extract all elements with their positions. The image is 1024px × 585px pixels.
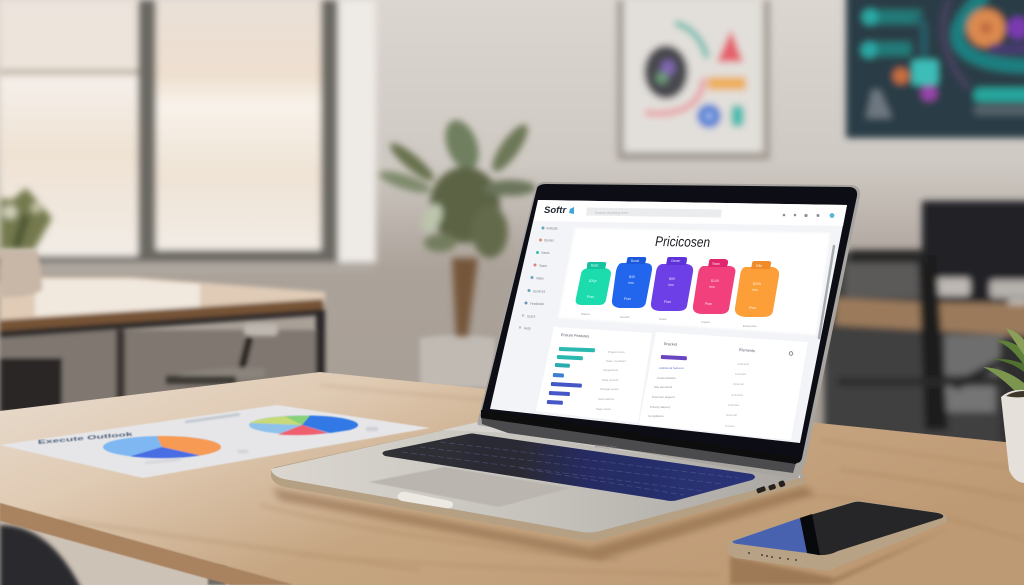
table rows: Premium support <box>652 395 675 399</box>
card captions: Impact <box>701 320 710 324</box>
pricing cards <box>576 257 779 317</box>
table rows: Site elements <box>654 385 673 389</box>
card: green: Plan <box>587 295 594 299</box>
bar labels: Team members <box>606 359 626 363</box>
card: pink: /mo <box>709 285 715 289</box>
table top <box>0 372 1024 585</box>
card: purple <box>651 257 693 311</box>
panel: pricing table: Elements <box>739 348 755 353</box>
sidebar menu: Team <box>539 264 547 268</box>
wood grain <box>60 385 1024 575</box>
table headers: Bracket <box>664 342 678 347</box>
card captions: Enterprise <box>743 324 757 328</box>
bar labels: Data records <box>602 378 619 382</box>
panel: pricing table <box>639 332 808 440</box>
laptop <box>271 182 860 541</box>
bar list heading: Ensure Features <box>561 333 589 338</box>
card: pink: $149 <box>711 279 719 283</box>
floor plant <box>377 115 536 388</box>
sidebar menu <box>519 226 558 330</box>
card: orange: Plan <box>749 306 756 310</box>
table rows: Customization <box>657 376 676 380</box>
card: blue: Plan <box>624 297 631 301</box>
logo: Softr <box>544 205 567 216</box>
card: pink: Plan <box>705 302 712 306</box>
laptop screen <box>490 200 847 443</box>
top bar icons <box>783 213 834 218</box>
sidebar menu: Stories <box>544 238 554 242</box>
table values: Custom <box>725 424 736 428</box>
pricing title: Pricicosen <box>655 233 710 250</box>
card: orange: Elite <box>756 264 762 268</box>
sidebar menu: Value <box>536 276 544 280</box>
pricing panel <box>558 228 830 335</box>
table values: Optional <box>733 382 744 386</box>
plant pot, left <box>0 250 42 297</box>
sidebar menu: Users <box>527 314 536 318</box>
right background furniture <box>824 201 1024 447</box>
card: purple: /mo <box>668 283 674 287</box>
floor plant pot <box>420 335 495 388</box>
card captions: Starter <box>581 312 590 316</box>
card: blue <box>612 257 652 308</box>
phone screen: black strip <box>800 514 820 555</box>
sidebar menu: Indicate <box>546 226 558 230</box>
bars <box>547 347 595 405</box>
report captions <box>145 413 378 464</box>
phone speaker holes <box>748 552 797 561</box>
card: purple: $99 <box>669 277 675 281</box>
table values: Unlimited <box>737 362 749 366</box>
phone screen: dark area <box>800 502 943 555</box>
card captions: Scale <box>659 317 667 321</box>
card: green: $3/yr <box>589 279 598 283</box>
front notch <box>398 492 453 508</box>
phone body <box>727 501 947 571</box>
brand mark: SAMSUNG <box>594 443 618 450</box>
floor plant leaves <box>377 115 536 258</box>
table <box>0 372 1024 585</box>
bar labels: Integrations <box>603 368 619 372</box>
card captions <box>581 312 757 328</box>
table shadow under laptop <box>272 486 815 560</box>
panel: bar list <box>536 327 652 423</box>
sidebar menu: Services <box>533 290 546 294</box>
table values: Unlimited <box>731 393 743 397</box>
background chair, left <box>166 324 278 384</box>
table rows: Compliance <box>648 414 664 418</box>
background desk, left <box>0 277 326 420</box>
table rows: Priority delivery <box>650 405 671 409</box>
highlight bar <box>661 355 687 360</box>
card: green <box>576 262 611 305</box>
sidebar menu: Views <box>541 251 550 255</box>
right plant leaves <box>983 328 1024 400</box>
table values: Included <box>735 372 746 376</box>
keyboard <box>382 434 755 501</box>
laptop base <box>271 422 806 541</box>
card: green: Basic <box>591 264 599 268</box>
card: blue: Boost <box>631 259 639 263</box>
hinge <box>442 422 800 478</box>
ports <box>756 480 786 494</box>
scrollbar <box>819 246 834 338</box>
trackpad <box>369 467 570 507</box>
card: purple: Plan <box>664 300 671 304</box>
phone screen: reflected blue <box>733 518 807 553</box>
window <box>0 0 376 274</box>
table rows <box>648 366 684 418</box>
foreground floor and chair <box>0 495 320 585</box>
wall artwork: light poster <box>617 0 770 160</box>
report title: Execute Outlook <box>38 432 135 446</box>
pie chart: right <box>249 416 358 435</box>
search bar: Search anything here <box>595 211 628 215</box>
table rows: Additional features <box>659 366 684 370</box>
sidebar menu: Help <box>524 326 531 330</box>
small plant, left <box>0 188 52 250</box>
bar labels: Storage space <box>600 387 619 391</box>
laptop lid <box>478 182 860 478</box>
card: orange <box>735 261 779 317</box>
card: orange: /mo <box>752 288 758 292</box>
card: orange: $199 <box>753 282 761 286</box>
bar labels <box>596 350 626 411</box>
logo mark <box>569 207 574 214</box>
paper report <box>0 405 430 478</box>
table front edge <box>0 503 295 585</box>
wall artwork: dark poster <box>846 0 1024 138</box>
top bar <box>534 200 847 226</box>
screen background <box>490 200 847 443</box>
search bar <box>586 208 722 218</box>
bar labels: Page views <box>596 407 611 411</box>
bar labels: Automations <box>598 397 615 401</box>
right plant pot <box>1001 390 1024 483</box>
card: pink: Team <box>712 262 720 266</box>
table values: Included <box>728 403 739 407</box>
card: purple: Owner <box>671 259 681 263</box>
card: pink <box>693 259 735 314</box>
sidebar menu: Feedback <box>530 302 544 306</box>
table values <box>725 362 749 428</box>
floor plant trunk <box>452 258 478 336</box>
right plant <box>983 328 1024 483</box>
lid chin <box>481 414 796 473</box>
table values: Optional <box>726 413 737 417</box>
key rows <box>402 442 738 495</box>
card: blue: /mo <box>628 281 634 285</box>
phone shadow <box>730 528 950 585</box>
pie chart: left <box>103 436 221 458</box>
phone <box>727 501 950 585</box>
card captions: Growth <box>620 315 630 319</box>
card: blue: $49 <box>629 275 635 279</box>
bar labels: Project items <box>608 350 625 354</box>
settings icon <box>789 352 793 355</box>
